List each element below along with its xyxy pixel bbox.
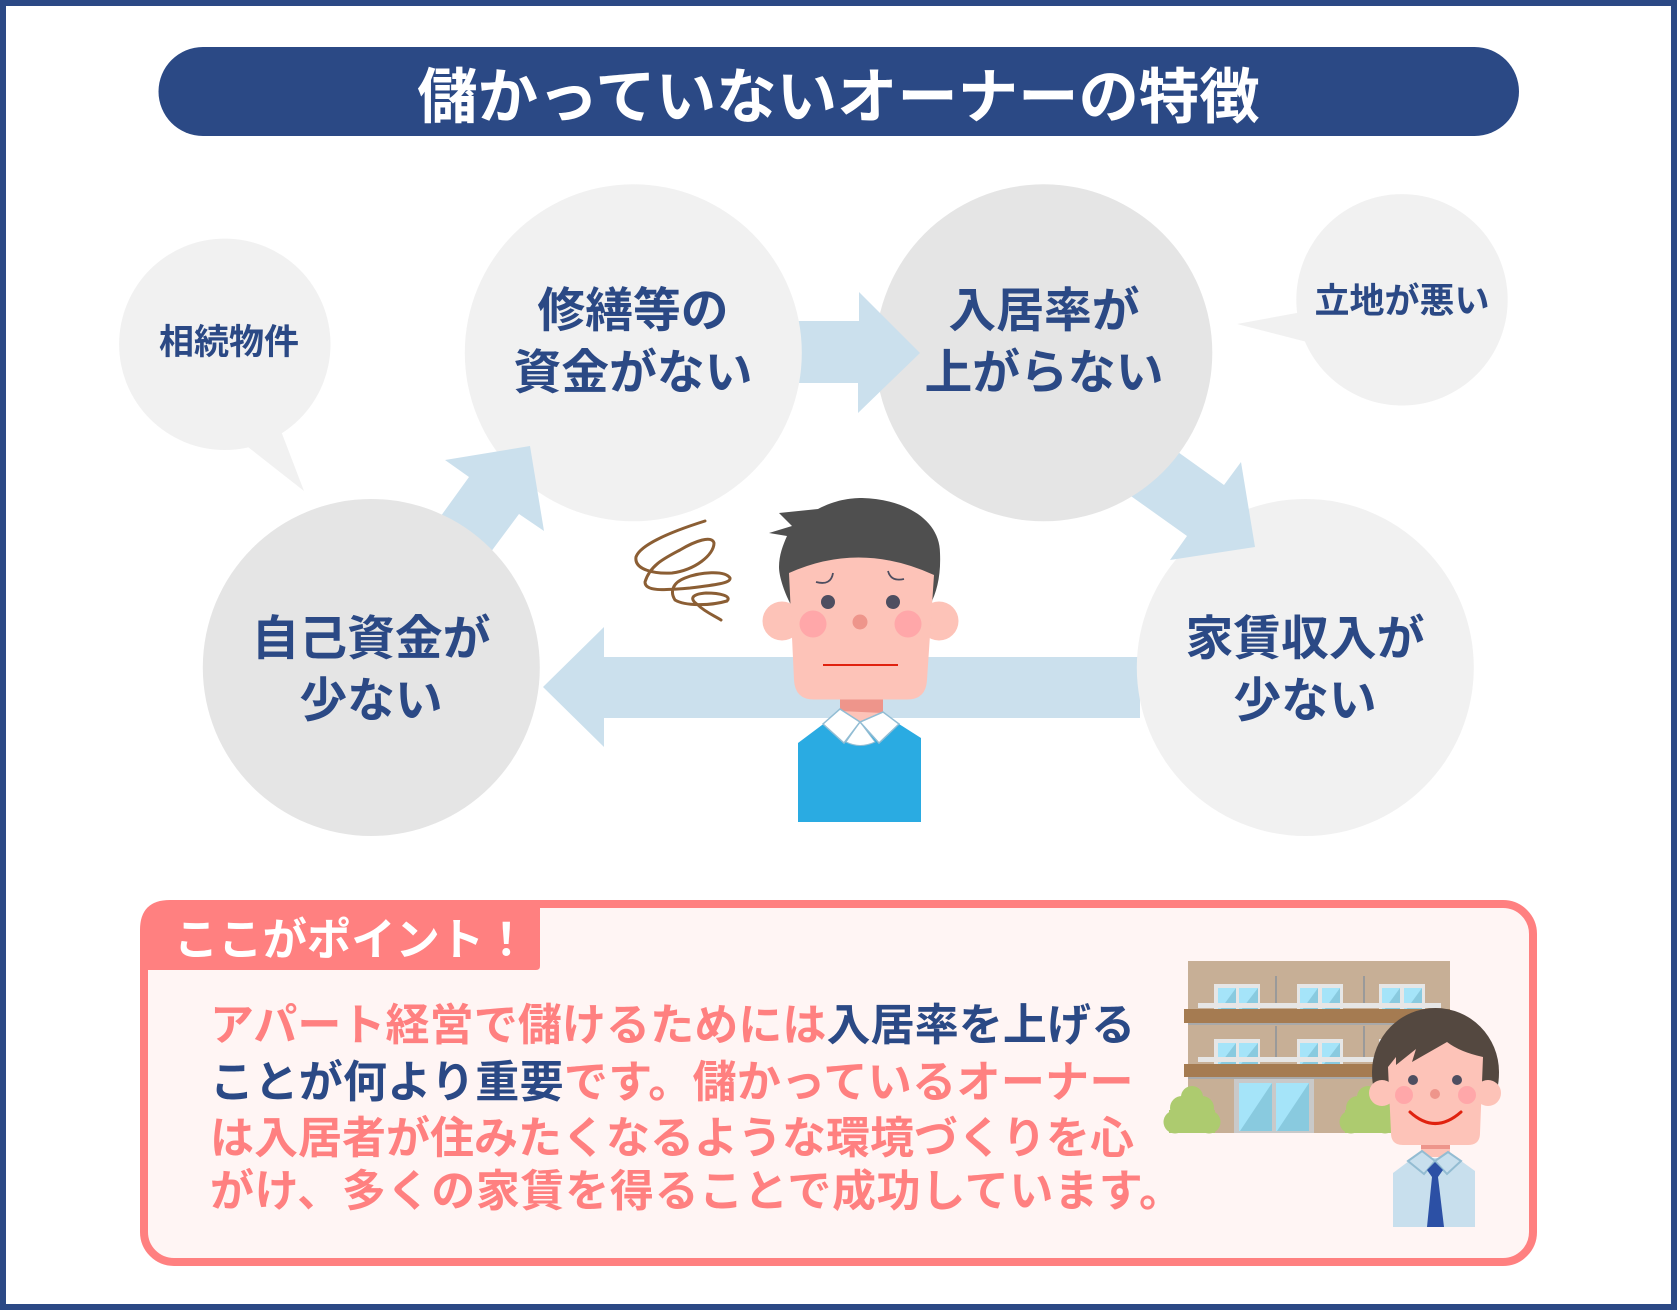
circle: low own capital: 自己資金が: [252, 613, 490, 666]
speech bubble: bad location: [1237, 194, 1508, 406]
circle: low rent income: [1137, 499, 1474, 836]
arrow: own capital to repair funds: [420, 446, 544, 580]
circle: low own capital: [203, 499, 540, 836]
illustration: worried owner: [762, 498, 958, 822]
label tab: key point: ここがポイント！: [174, 916, 528, 965]
circle: no funds for repairs: 修繕等の: [537, 285, 729, 338]
arrow: occupancy to rent income: [1100, 432, 1255, 560]
title: [158, 47, 1519, 136]
text block: key point body: がけ、多くの家賃を得ることで成功しています。: [210, 1167, 1184, 1216]
speech bubble: bad location: 立地が悪い: [1314, 282, 1490, 321]
circle: low rent income: 家賃収入が: [1186, 613, 1424, 666]
illustration: apartment building: [1164, 961, 1450, 1134]
speech bubble: inherited property: 相続物件: [159, 323, 299, 362]
title: 儲かっていないオーナーの特徴: [417, 63, 1260, 131]
panel: key point: [140, 900, 1533, 1262]
arrow: repair funds to occupancy: [780, 292, 920, 413]
circle: no funds for repairs: [465, 184, 802, 521]
circle: occupancy does not rise: [875, 184, 1212, 521]
circle: low rent income: 少ない: [1233, 675, 1377, 728]
text block: key point body: は入居者が住みたくなるような環境づくりを心: [210, 1114, 1134, 1163]
text block: key point body: [210, 1001, 1184, 1216]
circle: occupancy does not rise: 入居率が: [948, 285, 1140, 338]
illustration: smiling owner: [1369, 1008, 1501, 1227]
text block: key point body: ことが何より重要です。儲かっているオーナー: [210, 1058, 1134, 1107]
circle: occupancy does not rise: 上がらない: [924, 347, 1164, 400]
circle: no funds for repairs: 資金がない: [514, 347, 752, 400]
circle: low own capital: 少ない: [299, 675, 443, 728]
speech bubble: inherited property: [119, 239, 330, 491]
label tab: key point: [140, 900, 540, 970]
icon: worry scribble: [636, 521, 730, 620]
arrow: low rent income to low own capital: [543, 627, 1140, 747]
text block: key point body: アパート経営で儲けるためには入居率を上げる: [210, 1001, 1135, 1050]
